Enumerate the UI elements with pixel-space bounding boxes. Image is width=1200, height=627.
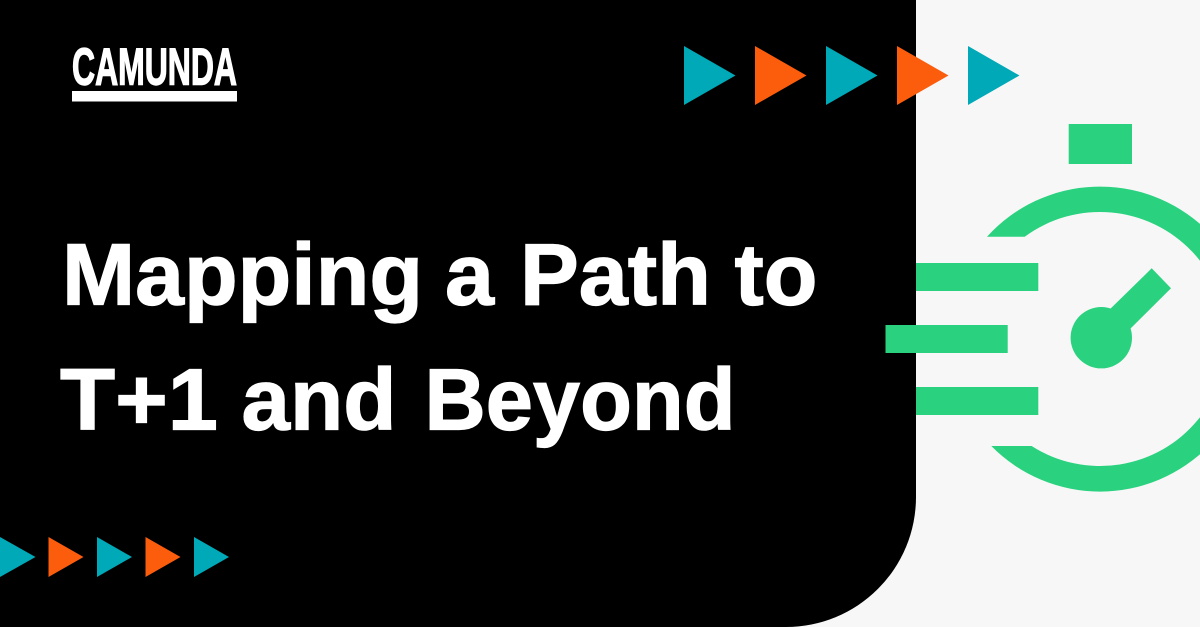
arrow 3: [97, 537, 132, 577]
arrow 2: [48, 537, 84, 577]
arrow 1: [684, 46, 736, 105]
icon: top row of arrows: [684, 46, 1020, 105]
title line 1: to: [734, 226, 818, 324]
speed line 1: [916, 263, 1038, 291]
title line 1: Path: [520, 226, 711, 324]
title line 1: a: [445, 226, 495, 324]
title line 2: T+1: [60, 352, 218, 448]
logo underline: [72, 91, 237, 102]
panel: black title panel: [0, 0, 916, 627]
title line 1: Mapping: [62, 226, 423, 324]
title: [60, 226, 818, 448]
icon: stopwatch: [886, 124, 1200, 492]
logo wordmark: CAMUNDA: [72, 38, 237, 96]
speed line 3: [916, 387, 1038, 415]
stopwatch hub: [1071, 307, 1132, 368]
title line 2: Beyond: [424, 352, 736, 448]
arrow 1: [0, 537, 36, 577]
speed line 2: [886, 325, 1008, 353]
stopwatch crown: [1069, 124, 1132, 164]
logo: Camunda: [72, 38, 237, 102]
stopwatch hand: [1105, 268, 1171, 334]
arrow 4: [897, 46, 948, 105]
arrow 2: [755, 46, 806, 105]
stopwatch ring: [987, 187, 1200, 492]
arrow 5: [968, 46, 1020, 105]
title line 2: and: [242, 352, 396, 448]
title line 2: [60, 352, 736, 448]
arrow 5: [194, 537, 229, 577]
title line 1: [62, 226, 818, 324]
arrow 3: [826, 46, 878, 105]
arrow 4: [146, 537, 180, 577]
icon: bottom row of arrows: [0, 537, 229, 577]
